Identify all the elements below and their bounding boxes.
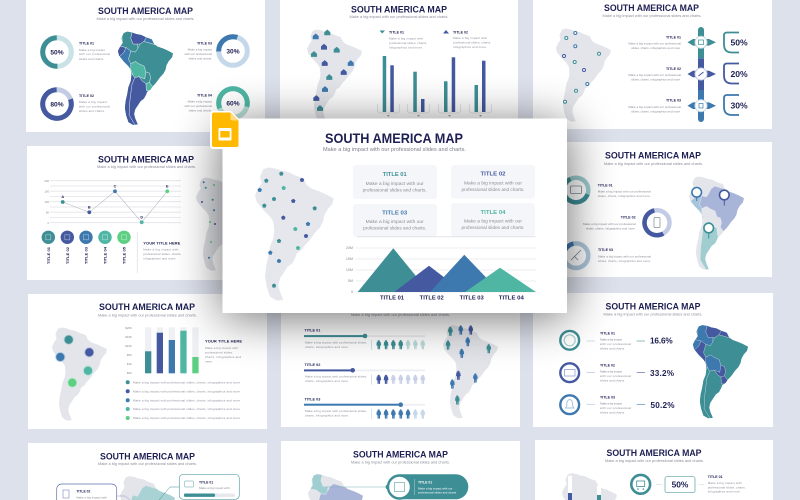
text block: title 02 — [583, 216, 636, 230]
text block: your title here: YOUR TITLE HERE — [143, 240, 181, 246]
progress row: title 03: TITLE 03 — [304, 398, 320, 402]
donut 30%: 30% — [226, 48, 240, 56]
text block: title 02: Make a big impact with our professional — [628, 73, 681, 77]
legend list: Make a big impact with professional slides, charts, infographics and more — [133, 389, 240, 393]
text block: title 01 — [598, 184, 651, 198]
area mountain chart: TITLE 04 — [499, 296, 524, 302]
column chart: $10K — [125, 344, 132, 348]
row: title 02, 33.2%: 33.2% — [650, 369, 675, 378]
main subtitle: Make a big impact with our professional slides and charts. — [323, 147, 466, 153]
card: title 03 — [353, 204, 437, 237]
callout pill: title 01: TITLE 01 — [418, 480, 432, 484]
slide subtitle: Make a big impact with our professional slides and charts. — [98, 462, 197, 466]
map: grey with circle markers — [52, 327, 107, 421]
area mountain chart: 10M — [346, 268, 353, 272]
slide title: SOUTH AMERICA MAP — [604, 3, 700, 14]
text block: title 01: Make a big impact with our professional — [598, 190, 651, 194]
line chart: B — [88, 206, 91, 210]
legend: title 02: infographics and more. — [453, 45, 487, 49]
text block: title 01: Make a big impact with — [708, 481, 742, 485]
map: highlighted countries — [308, 474, 366, 500]
text block: title 02: Make a big impact with our professional — [583, 222, 636, 226]
card: title 01: professional slides and charts. — [363, 187, 427, 192]
slide subtitle: Make a big impact with our professional slides and charts. — [351, 313, 450, 317]
map pins — [692, 188, 729, 238]
slide subtitle: Make a big impact with our professional slides and charts. — [351, 460, 450, 464]
row: title 02, 33.2%: slides and charts. — [600, 378, 625, 382]
line chart — [44, 179, 181, 225]
donut 30% — [219, 37, 247, 65]
text block: your title here: Make a big impact with — [143, 248, 179, 252]
row: title 03, 50.2%: TITLE 03 — [600, 396, 615, 400]
legend list — [126, 380, 240, 420]
row: title 03, 50.2%: with our professional — [600, 406, 631, 410]
icon row with vertical titles: TITLE 04 — [103, 246, 108, 264]
slide title: SOUTH AMERICA MAP — [98, 6, 194, 17]
progress row: title 02: Make a big impact with professional slides, — [305, 374, 367, 378]
row: title 02, 33.2%: TITLE 02 — [600, 364, 615, 368]
text block: title 01: slides and charts. — [79, 57, 104, 61]
area mountain chart: TITLE 02 — [420, 296, 444, 302]
donut 60% — [215, 85, 251, 121]
percent callouts: 20% — [730, 69, 748, 79]
row: title 01, 16.6%: slides and charts. — [600, 346, 625, 350]
line chart: C — [114, 184, 117, 188]
line chart: A — [61, 195, 64, 199]
main title: SOUTH AMERICA MAP — [325, 130, 463, 146]
text block: title 01: infographics and more. — [708, 490, 741, 494]
text block: title 03: Make a big impact with our professional — [628, 105, 681, 109]
line chart: 0 — [47, 221, 49, 225]
text block: title 02 — [628, 67, 681, 82]
area mountain chart — [346, 237, 536, 302]
card: title 01: Make a big impact with our — [366, 181, 424, 186]
icon row with vertical titles: TITLE 05 — [122, 246, 127, 264]
area mountain chart: TITLE 01 — [380, 296, 404, 302]
legend list: Make a big impact with professional slides, charts, infographics and more — [133, 416, 240, 420]
progress row: title 01: charts, infographics and more. — [305, 345, 349, 349]
row: title 02, 33.2%: with our professional — [600, 374, 631, 378]
callout: title 01 — [159, 474, 239, 500]
panel: percentages slide — [533, 293, 773, 427]
slide title: SOUTH AMERICA MAP — [99, 302, 196, 313]
column chart: $5K — [127, 353, 132, 357]
map: grey with circle markers — [556, 28, 611, 122]
card: title 01: TITLE 01 — [383, 172, 407, 178]
donut 50%: 50% — [50, 50, 64, 56]
progress row: title 01: TITLE 01 — [304, 328, 320, 332]
text block: title 04: with our professional — [184, 104, 212, 108]
area mountain chart: 15M — [346, 257, 353, 261]
legend: title 01: infographics and more. — [389, 46, 423, 50]
area mountain chart: TITLE 03 — [460, 296, 484, 302]
slide title: SOUTH AMERICA MAP — [351, 4, 448, 16]
text block: title 03: Make a big impact with our professional — [598, 254, 651, 258]
area mountain chart: 20M — [346, 246, 353, 250]
legend: title 01: Make a big impact with — [389, 36, 423, 40]
row: title 02, 33.2%: Make a big impact — [600, 370, 622, 374]
callout pill: title 01: professional slides and charts. — [418, 490, 457, 494]
slide subtitle: Make a big impact with our professional slides and charts. — [97, 165, 196, 169]
legend: title 01 — [380, 30, 427, 50]
card: title 04 — [451, 203, 535, 236]
line chart: E — [166, 184, 169, 188]
legend: title 01: professional slides, charts, — [389, 41, 427, 45]
text block: title 01: Make a big impact with our professional — [628, 42, 681, 46]
column chart: $0K — [127, 371, 132, 375]
column chart: $20K — [125, 326, 132, 330]
panel: stacked bars slide — [28, 294, 267, 429]
panel: bar chart slide — [280, 0, 518, 125]
percent box 50%: 50% — [672, 480, 689, 490]
map: grey with house pins — [307, 29, 362, 123]
text block: your title here: professional slides, — [205, 350, 233, 354]
donut 60%: 60% — [226, 100, 240, 108]
row: title 02, 33.2% — [560, 363, 675, 382]
card: title 03: Make a big impact with our — [366, 219, 424, 224]
icon row with vertical titles: TITLE 01 — [46, 246, 51, 264]
legend: title 02: professional slides, charts, — [453, 40, 491, 44]
row: title 03, 50.2%: slides and charts. — [600, 410, 625, 414]
text block: your title here: infographics and more. — [143, 256, 176, 260]
text block: title 04: Make a big impact — [188, 100, 212, 104]
progress row: title 02 — [304, 363, 425, 384]
row: title 03, 50.2%: 50.2% — [650, 401, 675, 410]
icon row with vertical titles: TITLE 03 — [84, 246, 89, 264]
ring icon — [631, 475, 650, 494]
donut 80% — [39, 86, 75, 122]
icon row with vertical titles — [42, 231, 131, 264]
slide subtitle: Make a big impact with our professional slides and charts. — [602, 14, 702, 18]
text block: your title here — [205, 338, 242, 364]
text block: title 03: Make a big impact — [188, 48, 212, 52]
text block: your title here — [143, 240, 181, 260]
card: title 04: Make a big impact with our — [464, 218, 523, 224]
map: highlighted countries — [689, 176, 744, 270]
column chart — [125, 326, 199, 375]
text block: title 01: TITLE 01 — [598, 184, 613, 188]
legend list: Make a big impact with professional slides, charts, infographics and more — [133, 398, 240, 402]
text block: your title here: professional slides, charts, — [143, 252, 181, 256]
legend list: Make a big impact with professional slides, charts, infographics and more — [133, 380, 240, 384]
slide subtitle: Make a big impact with our professional slides and charts. — [350, 15, 448, 19]
text block: title 01 — [628, 36, 681, 50]
slide title: SOUTH AMERICA MAP — [100, 451, 196, 462]
map: highlighted Brazil — [120, 476, 178, 500]
legend: title 02: Make a big impact with — [453, 36, 487, 40]
text block: title 04 — [184, 94, 212, 112]
callout: title 02: TITLE 02 — [76, 490, 91, 494]
card: title 04: TITLE 04 — [480, 210, 506, 216]
map: coloured countries — [118, 32, 173, 125]
icon: Google Slides — [210, 111, 240, 149]
text block: title 01: professional slides, charts, — [708, 485, 746, 489]
donut: title 02 — [640, 206, 674, 240]
slide subtitle: Make a big impact with our professional slides and charts. — [604, 162, 703, 166]
row: title 01, 16.6%: Make a big impact — [600, 338, 622, 342]
text block: title 04: slides and charts. — [189, 108, 212, 112]
text block: title 03: slides and charts. — [189, 56, 212, 60]
text block: title 01: slides, charts, infographics and more. — [631, 46, 681, 50]
donut: title 03 — [559, 239, 593, 273]
text block: your title here: Make a big impact with — [205, 346, 238, 350]
callout: title 01: TITLE 01 — [199, 480, 213, 484]
text block: title 03: TITLE 03 — [666, 98, 681, 102]
panel: bottom-right slide — [535, 440, 773, 500]
line chart: 200 — [44, 179, 49, 183]
bar chart — [378, 56, 492, 117]
callout: title 01: Make a big impact with — [199, 486, 230, 490]
text block: title 01 — [79, 42, 110, 61]
donut: title 01 — [560, 174, 592, 206]
donut 80%: 80% — [50, 102, 64, 108]
text block: title 03 — [628, 98, 681, 114]
panel: main slide — [222, 118, 567, 313]
donut 50% — [43, 38, 71, 66]
line chart: D — [140, 216, 143, 220]
card: title 02: TITLE 02 — [480, 172, 506, 178]
area mountain chart: 5M — [348, 279, 353, 283]
progress row: title 03: Make a big impact with professional slides, — [305, 409, 367, 413]
progress row: title 01 — [304, 328, 425, 350]
card: title 02: professional slides and charts. — [462, 187, 524, 192]
card: title 01 — [353, 165, 437, 199]
map: coloured countries — [693, 325, 748, 418]
row: title 01, 16.6% — [560, 331, 673, 350]
text block: title 03: TITLE 03 — [598, 248, 613, 252]
panel: timeline slide — [533, 0, 772, 129]
text block: title 01: Make a big impact — [79, 48, 105, 52]
slide subtitle: Make a big impact with our professional slides and charts. — [604, 312, 702, 316]
card: title 03: professional slides and charts. — [363, 226, 426, 230]
percent box 50% — [665, 477, 695, 493]
text block: title 01: TITLE 01 — [79, 42, 94, 46]
legend: title 01: TITLE 01 — [389, 30, 404, 34]
card: title 04: professional slides and charts. — [462, 225, 524, 230]
progress row: title 02: charts, infographics and more. — [305, 379, 349, 383]
panel: line chart slide — [27, 146, 251, 280]
card: title 03: TITLE 03 — [382, 211, 407, 217]
slide title: SOUTH AMERICA MAP — [606, 302, 701, 312]
callout pill: title 01: Make a big impact with our — [418, 486, 452, 490]
slide title: SOUTH AMERICA MAP — [353, 449, 449, 460]
icon row with vertical titles: TITLE 02 — [65, 246, 70, 264]
text block: title 03: slides, charts, infographics and more. — [598, 259, 651, 263]
progress row: title 02: TITLE 02 — [304, 363, 320, 367]
text block: title 02: with our professional — [79, 104, 110, 108]
text block: title 02: Make a big impact — [79, 100, 107, 104]
percent callouts: 50% — [730, 38, 748, 48]
text block: title 01: TITLE 01 — [666, 36, 681, 40]
progress row: title 03: charts, infographics and more. — [305, 414, 349, 418]
vertical timeline — [688, 27, 716, 122]
text block: title 01: slides, charts, infographics and more. — [598, 194, 651, 198]
percent callouts: 30% — [730, 101, 748, 111]
text block: your title here: charts, infographics and — [205, 355, 241, 359]
row: title 03, 50.2% — [560, 395, 675, 414]
column chart: $1K — [127, 362, 132, 366]
legend list: Make a big impact with professional slides, charts, infographics and more — [133, 407, 240, 411]
row: title 01, 16.6%: TITLE 01 — [600, 332, 615, 336]
text block: title 03: TITLE 03 — [197, 42, 212, 46]
map: grey with people pins — [443, 325, 498, 418]
row: title 01, 16.6%: with our professional — [600, 342, 631, 346]
slide subtitle: Make a big impact with our professional slides and charts. — [96, 17, 194, 21]
text block: your title here: more. — [205, 360, 213, 364]
card: title 02 — [451, 165, 535, 198]
row: title 01, 16.6%: 16.6% — [650, 336, 673, 346]
area mountain chart: 0 — [351, 290, 353, 294]
slide title: SOUTH AMERICA MAP — [98, 154, 195, 166]
line chart: 50 — [46, 210, 49, 214]
callout pill: title 01 — [326, 474, 468, 499]
text block: title 02: TITLE 02 — [621, 216, 636, 220]
callout: title 02 — [57, 484, 130, 500]
line chart: 100 — [44, 200, 49, 204]
row: title 03, 50.2%: Make a big impact — [600, 402, 622, 406]
text block: title 03: with our professional — [184, 52, 212, 56]
text block: title 01: TITLE 01 — [708, 475, 723, 479]
legend: title 02: TITLE 02 — [453, 30, 468, 34]
column chart: $15K — [125, 335, 132, 339]
text block: title 03 — [598, 248, 651, 263]
panel: people progress slide — [281, 293, 520, 427]
text block: title 03 — [184, 42, 212, 60]
slide subtitle: Make a big impact with our professional slides and charts. — [98, 314, 197, 318]
percent callouts — [724, 32, 748, 115]
progress row: title 03 — [304, 398, 425, 419]
callout: title 02: Make a big impact with — [76, 496, 107, 500]
progress row: title 01: Make a big impact with professional slides, — [305, 340, 367, 344]
slide subtitle: Make a big impact with our professional slides and charts. — [605, 459, 704, 463]
line chart: 150 — [44, 190, 49, 194]
slide title: SOUTH AMERICA MAP — [606, 448, 702, 459]
text block: title 02: slides, charts, infographics and more. — [631, 78, 681, 82]
text block: title 02: TITLE 02 — [79, 94, 94, 98]
text block: title 03: slides, charts, infographics and more. — [631, 110, 681, 114]
text block: your title here: YOUR TITLE HERE — [205, 338, 242, 344]
legend: title 02 — [443, 30, 491, 49]
card: title 02: Make a big impact with our — [464, 180, 523, 186]
map: grey with column pins — [562, 473, 617, 500]
panel: donut chart slide — [26, 0, 265, 132]
slide title: SOUTH AMERICA MAP — [605, 150, 702, 162]
panel: pin map slide — [558, 142, 772, 277]
panel: bottom-left slide — [28, 443, 267, 500]
text block: title 01 — [708, 475, 746, 494]
panel: bottom-middle slide — [281, 441, 520, 500]
text block: title 02: slides, charts, infographics and more. — [586, 226, 636, 230]
text block: title 02: TITLE 02 — [666, 67, 681, 71]
text block: title 01: with our professional — [79, 52, 110, 56]
map: grey with pentagon markers — [255, 167, 334, 301]
text block: title 02 — [79, 94, 110, 113]
text block: title 04: TITLE 04 — [197, 94, 212, 98]
text block: title 02: slides and charts. — [79, 109, 105, 113]
map: grey with dots — [196, 177, 251, 271]
